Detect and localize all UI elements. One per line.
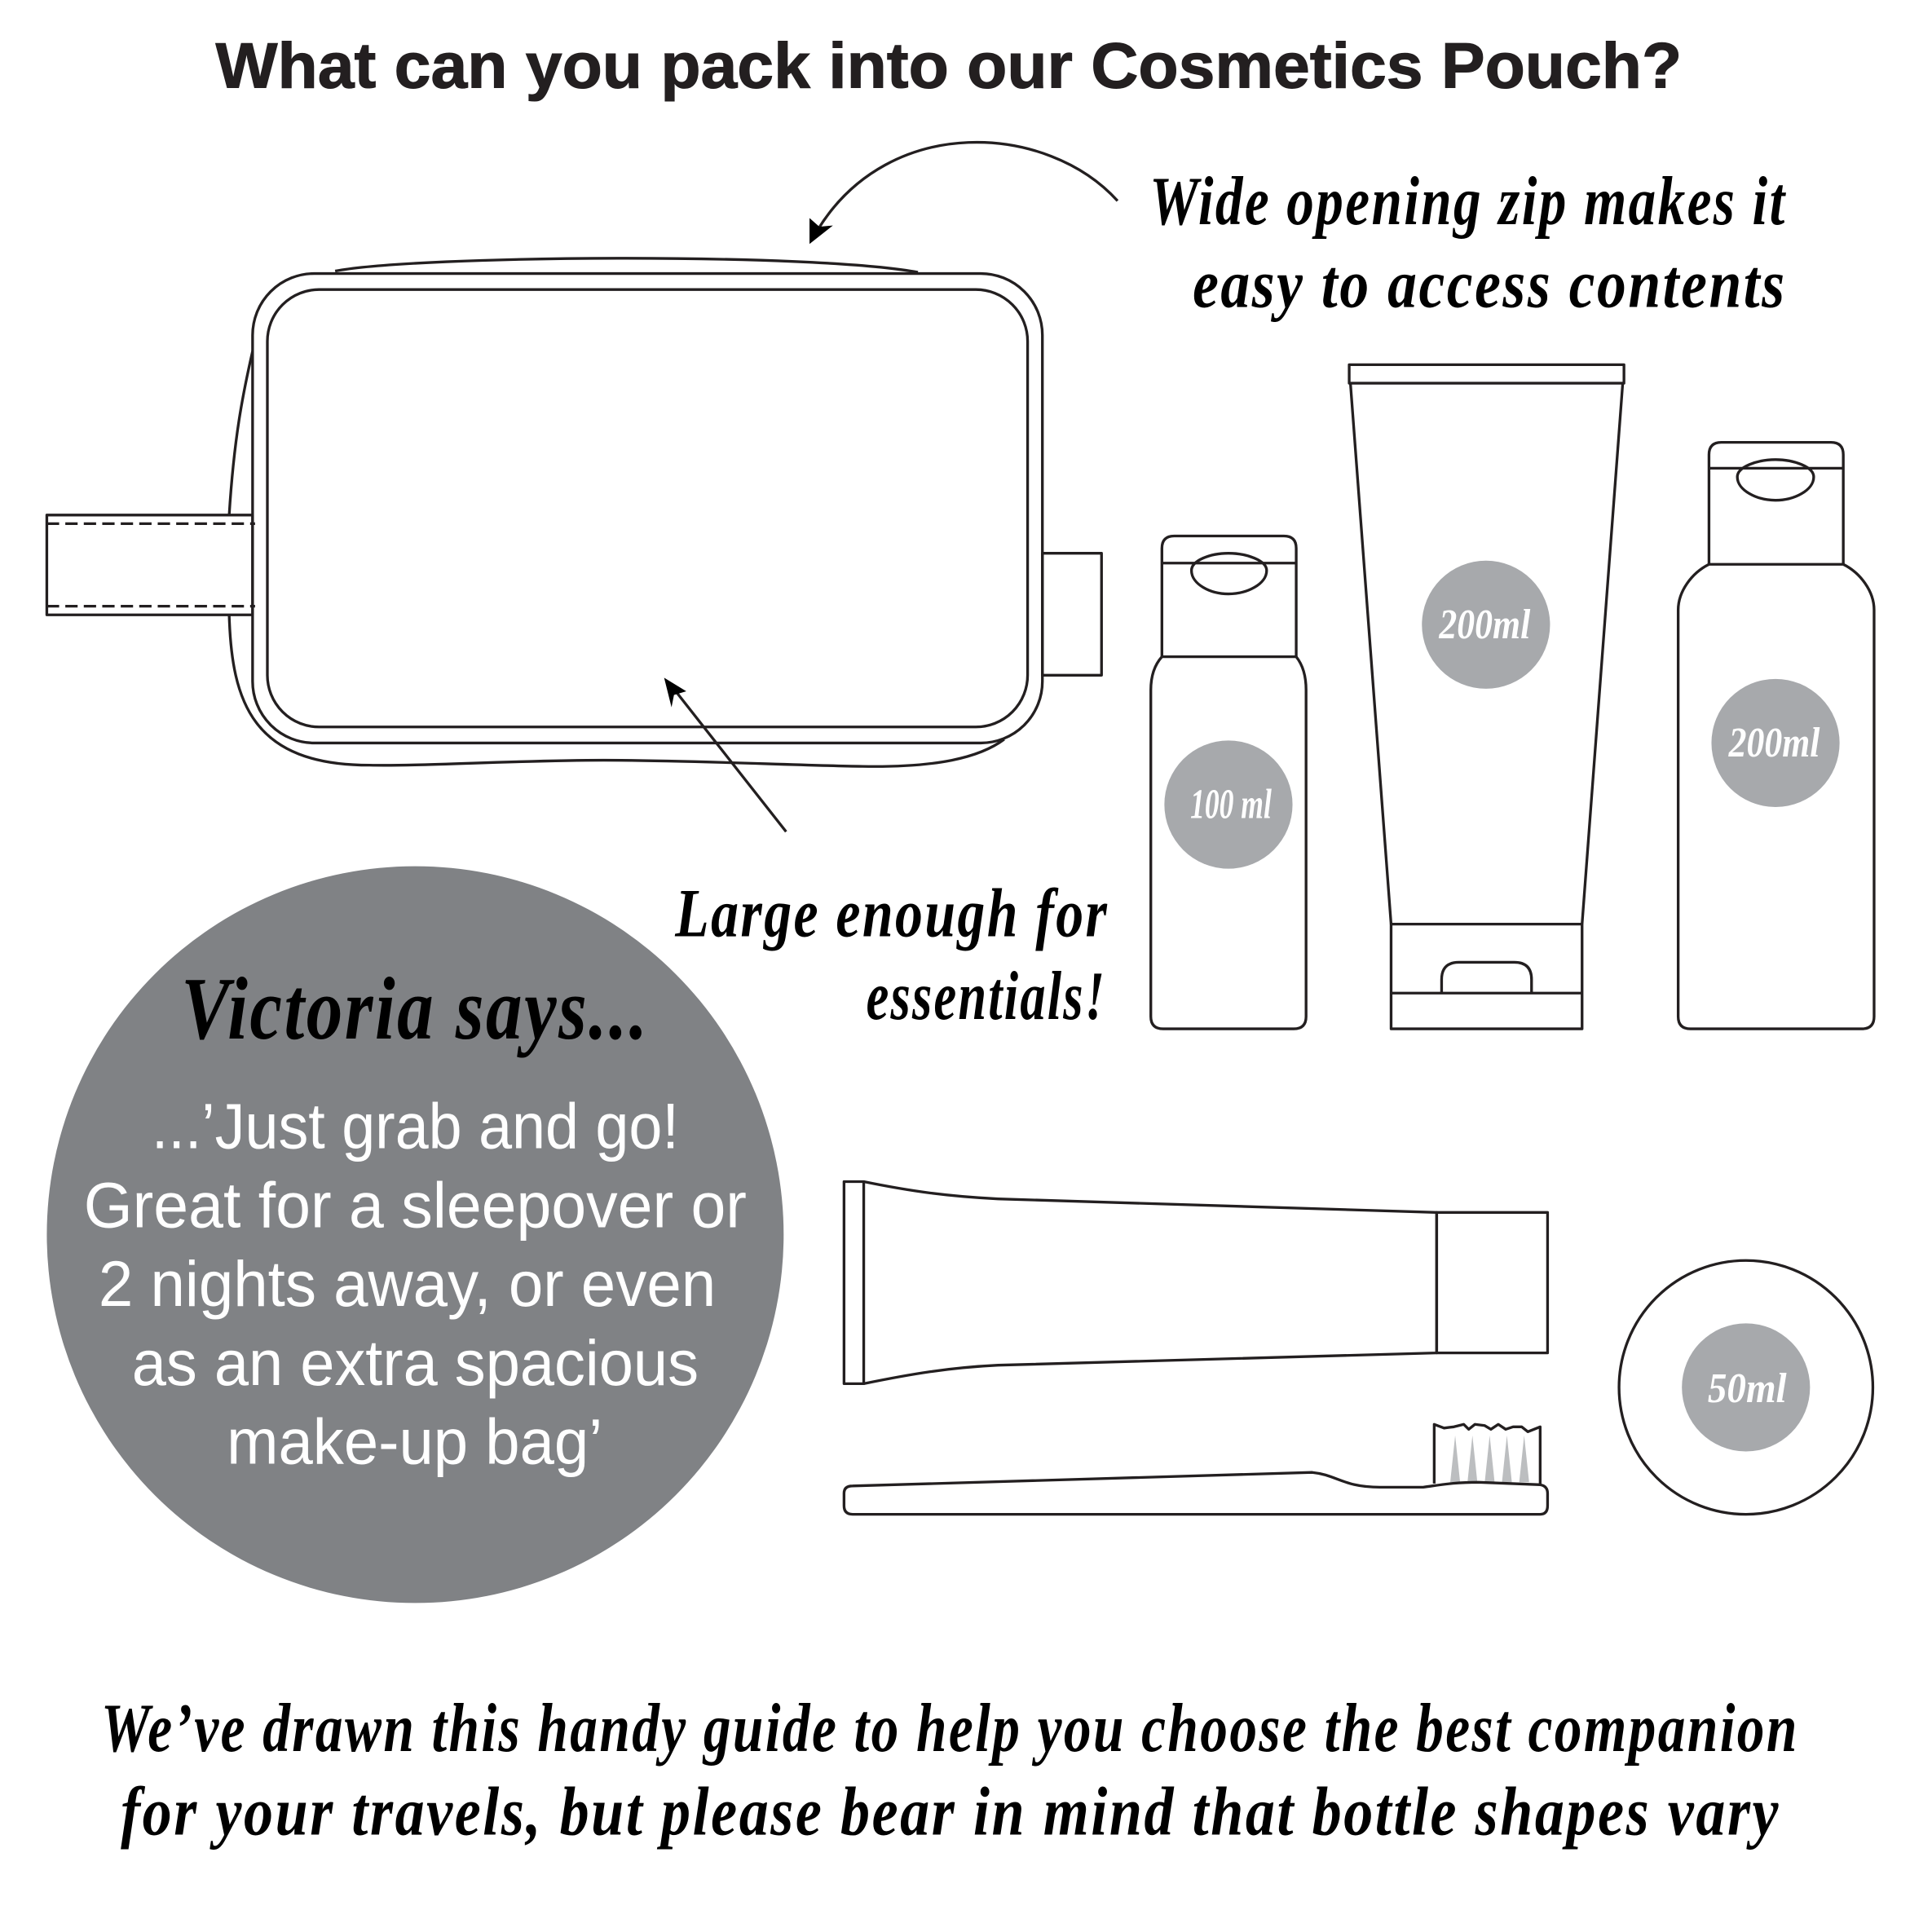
quote heading: Victoria says... — [181, 959, 650, 1058]
200ml bottle badge: 200ml — [1728, 720, 1820, 766]
illustration: toothpaste tube — [844, 1182, 1547, 1383]
100ml badge — [1164, 740, 1293, 869]
annotation: large enough: Large enough for — [674, 876, 1109, 952]
pouch tab — [1043, 554, 1101, 675]
pouch inner edge — [267, 289, 1028, 727]
arrow: large enough — [664, 677, 786, 831]
pouch strap — [46, 515, 255, 615]
illustration: 50ml jar — [1619, 1260, 1872, 1515]
annotation: wide opening zip: Wide opening zip makes it — [1149, 164, 1787, 240]
quote circle — [46, 867, 783, 1603]
annotation: wide opening zip: easy to access contents — [1193, 246, 1787, 322]
arrow: zip curve — [809, 143, 1118, 244]
title: What can you pack into our Cosmetics Pouch? — [216, 29, 1682, 101]
annotation: wide opening zip — [1149, 164, 1787, 322]
50ml badge: 50ml — [1708, 1365, 1787, 1412]
quote text: Great for a sleepover or — [84, 1169, 747, 1241]
quote text: 2 nights away, or even — [99, 1248, 716, 1320]
200ml tube badge — [1422, 561, 1550, 689]
annotation: large enough — [674, 876, 1109, 1034]
annotation: large enough: essentials! — [867, 959, 1106, 1034]
illustration: toothbrush — [844, 1424, 1547, 1515]
pouch outer edge — [253, 274, 1043, 743]
quote text: make-up bag’ — [227, 1406, 602, 1478]
quote text: as an extra spacious — [132, 1327, 699, 1399]
illustration: 200ml tube — [1349, 364, 1624, 1029]
illustration: cosmetics pouch — [46, 258, 1101, 766]
100ml badge: 100 ml — [1190, 782, 1272, 828]
200ml bottle badge — [1711, 679, 1840, 807]
200ml tube badge: 200ml — [1439, 602, 1531, 648]
50ml badge — [1682, 1323, 1810, 1452]
illustration: 100ml bottle — [1151, 536, 1306, 1029]
footer note — [101, 1691, 1799, 1850]
quote text — [84, 1091, 747, 1478]
illustration: 200ml bottle — [1678, 443, 1874, 1029]
quote text: ...’Just grab and go! — [152, 1091, 679, 1162]
